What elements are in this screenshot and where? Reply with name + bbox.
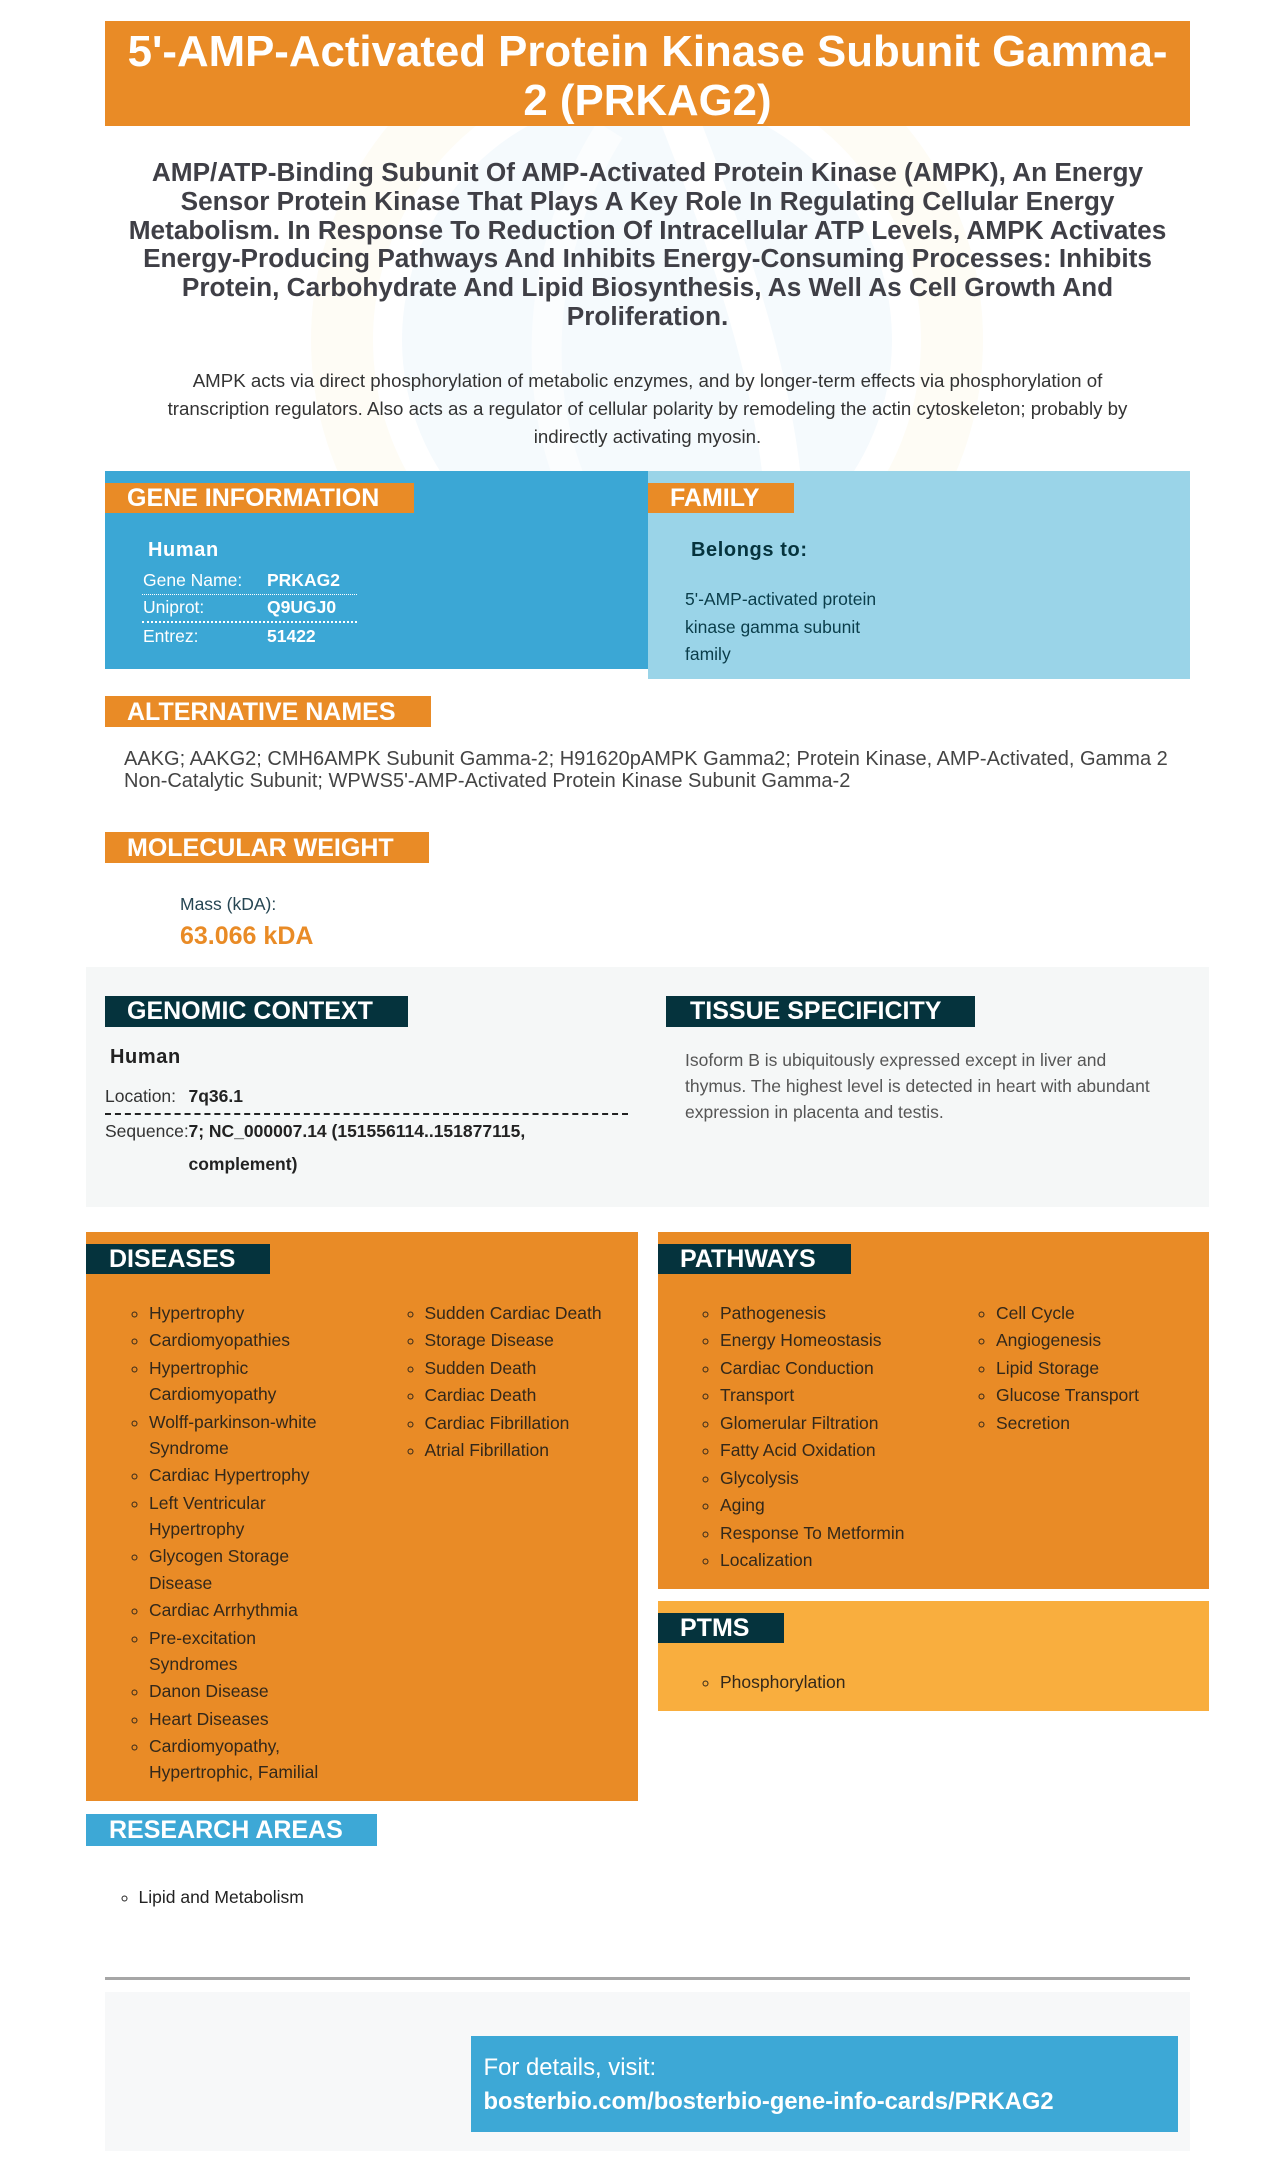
PTMs list: Phosphorylation	[720, 1672, 846, 1692]
diseases list column 1: Hypertrophy	[149, 1303, 244, 1323]
gene identifier rows	[142, 570, 357, 646]
heading: alternative names: ALTERNATIVE NAMES	[127, 698, 396, 726]
research areas list: Lipid and Metabolism	[138, 1887, 304, 1907]
diseases list column 2: Sudden Death	[424, 1358, 536, 1378]
pathways list column 1: Response To Metformin	[720, 1522, 904, 1542]
subtitle: protein function summary: Sensor Protein Kinase That Plays A Key Role In Regulating Cellular Energy	[181, 186, 1114, 216]
tissue specificity text: Isoform B is ubiquitously expressed except in liver and	[685, 1050, 1106, 1070]
pathways list column 2: Secretion	[996, 1413, 1070, 1433]
diseases list column 2: Cardiac Death	[424, 1385, 536, 1405]
subtitle: protein function summary: Proliferation.	[567, 301, 728, 331]
alternative names text: Non-Catalytic Subunit; WPWS5'-AMP-Activated Protein Kinase Subunit Gamma-2	[124, 770, 850, 792]
sequence value	[188, 1120, 525, 1174]
pathways list column 2: Cell Cycle	[996, 1303, 1075, 1323]
diseases list column 2: Storage Disease	[424, 1330, 554, 1350]
heading: diseases: DISEASES	[109, 1245, 235, 1273]
heading: genomic context: GENOMIC CONTEXT	[127, 997, 373, 1025]
belongs to label: Belongs to:	[691, 538, 808, 560]
subtitle: protein function summary: Metabolism. In Response To Reduction Of Intracellular ATP Levels, AMPK Activates	[129, 215, 1166, 245]
description paragraph	[168, 370, 1128, 447]
sequence label: Sequence:	[105, 1121, 189, 1141]
background watermark logo	[311, 126, 983, 471]
panel: PTMs	[658, 1601, 1209, 1711]
diseases list column 2	[408, 1303, 602, 1460]
heading: PTMs	[658, 1613, 784, 1643]
pathways list column 1: Fatty Acid Oxidation	[720, 1440, 876, 1460]
heading: tissue specificity: TISSUE SPECIFICITY	[690, 997, 941, 1025]
heading: family: FAMILY	[670, 484, 759, 512]
diseases list column 1: Cardiomyopathy,	[149, 1736, 280, 1756]
alternative names text: AAKG; AAKG2; CMH6AMPK Subunit Gamma-2; H91620pAMPK Gamma2; Protein Kinase, AMP-Activated, Gamma 2	[124, 748, 1168, 770]
diseases list column 1: Hypertrophy	[149, 1519, 244, 1539]
title: 5'-AMP-Activated Protein Kinase Subunit Gamma-	[128, 27, 1167, 76]
subtitle: protein function summary: Protein, Carbohydrate And Lipid Biosynthesis, As Well As Cell Growth And	[182, 272, 1113, 302]
subtitle: protein function summary: AMP/ATP-Binding Subunit Of AMP-Activated Protein Kinase (AMPK), An Energy	[152, 157, 1143, 187]
heading: research areas: RESEARCH AREAS	[109, 1816, 343, 1844]
diseases list column 2: Sudden Cardiac Death	[424, 1303, 602, 1323]
diseases list column 1: Disease	[149, 1573, 212, 1593]
panel: gene information	[105, 471, 648, 669]
pathways list column 2: Angiogenesis	[996, 1330, 1101, 1350]
species name: Human	[110, 1046, 181, 1068]
tissue specificity text	[685, 1050, 1150, 1122]
pathways list column 1: Energy Homeostasis	[720, 1330, 881, 1350]
family description	[685, 589, 876, 664]
diseases list column 1: Hypertrophic, Familial	[149, 1762, 318, 1782]
panel: pathways	[658, 1232, 1209, 1589]
family description: 5'-AMP-activated protein	[685, 589, 876, 609]
tissue specificity text: thymus. The highest level is detected in heart with abundant	[685, 1076, 1150, 1096]
description paragraph: transcription regulators. Also acts as a regulator of cellular polarity by remodeling the actin cytoskeleton; probably by	[168, 398, 1127, 419]
location row: Location:	[105, 1086, 176, 1106]
diseases list column 1: Cardiomyopathy	[149, 1384, 276, 1404]
subtitle: protein function summary: Energy-Producing Pathways And Inhibits Energy-Consuming Processes: Inhibits	[143, 243, 1152, 273]
location value: 7q36.1	[188, 1086, 243, 1106]
family description: family	[685, 644, 731, 664]
diseases list column 1: Pre-excitation	[149, 1628, 256, 1648]
diseases list column 1: Glycogen Storage	[149, 1546, 289, 1566]
diseases list column 1: Cardiac Hypertrophy	[149, 1465, 309, 1485]
diseases list column 1	[132, 1303, 318, 1782]
diseases list column 1: Cardiac Arrhythmia	[149, 1600, 298, 1620]
diseases list column 1: Syndrome	[149, 1438, 229, 1458]
pathways list column 1: Transport	[720, 1385, 794, 1405]
gene identifier rows: Uniprot:	[143, 597, 204, 617]
diseases list column 1: Syndromes	[149, 1654, 238, 1674]
title	[105, 21, 1190, 126]
heading: PTMs: PTMS	[680, 1614, 749, 1642]
pathways list column 2	[978, 1303, 1139, 1433]
panel: family	[648, 471, 1190, 679]
heading: family	[648, 483, 794, 513]
diseases list column 1: Left Ventricular	[149, 1493, 266, 1513]
title: 2 (PRKAG2)	[523, 76, 772, 125]
family description: kinase gamma subunit	[685, 616, 860, 636]
pathways list column 1: Pathogenesis	[720, 1303, 826, 1323]
heading: molecular weight: MOLECULAR WEIGHT	[127, 834, 394, 862]
gene identifier rows: PRKAG2	[267, 570, 340, 590]
callout: details link	[471, 2036, 1178, 2132]
tissue specificity text: expression in placenta and testis.	[685, 1102, 944, 1122]
diseases list column 1: Hypertrophic	[149, 1358, 248, 1378]
pathways list column 1: Cardiac Conduction	[720, 1358, 874, 1378]
diseases list column 2: Cardiac Fibrillation	[424, 1413, 569, 1433]
sequence value: 7; NC_000007.14 (151556114..151877115,	[188, 1120, 525, 1140]
heading: gene information: GENE INFORMATION	[127, 484, 379, 512]
heading: pathways	[658, 1244, 851, 1274]
mass value: 63.066 kDA	[180, 922, 313, 950]
gene identifier rows: 51422	[267, 626, 316, 646]
sequence value: complement)	[188, 1154, 297, 1174]
panel: footer	[105, 1992, 1190, 2151]
callout URL: bosterbio.com/bosterbio-gene-info-cards/PRKAG2	[484, 2088, 1054, 2115]
species name: Human	[148, 538, 219, 560]
diseases list column 1: Danon Disease	[149, 1681, 269, 1701]
subtitle: protein function summary	[129, 157, 1166, 331]
mass label: Mass (kDA):	[180, 894, 276, 914]
diseases list column 2: Atrial Fibrillation	[424, 1440, 549, 1460]
pathways list column 2: Lipid Storage	[996, 1358, 1099, 1378]
gene identifier rows: Q9UGJ0	[267, 597, 336, 617]
alternative names text	[124, 748, 1168, 792]
pathways list column 1: Glycolysis	[720, 1468, 799, 1488]
pathways list column 1: Glomerular Filtration	[720, 1413, 879, 1433]
description paragraph: indirectly activating myosin.	[534, 426, 761, 447]
heading: diseases	[86, 1244, 270, 1274]
pathways list column 1	[702, 1303, 904, 1570]
gene identifier rows: Entrez:	[143, 626, 198, 646]
panel: diseases	[86, 1232, 638, 1801]
heading: pathways: PATHWAYS	[680, 1245, 816, 1273]
diseases list column 1: Wolff-parkinson-white	[149, 1412, 317, 1432]
diseases list column 1: Heart Diseases	[149, 1709, 269, 1729]
gene identifier rows: Gene Name:	[143, 570, 242, 590]
description paragraph: AMPK acts via direct phosphorylation of metabolic enzymes, and by longer-term effects via phosphorylation of	[193, 370, 1102, 391]
pathways list column 1: Localization	[720, 1550, 812, 1570]
diseases list column 1: Cardiomyopathies	[149, 1330, 290, 1350]
pathways list column 2: Glucose Transport	[996, 1385, 1139, 1405]
callout label: For details, visit:	[484, 2054, 656, 2081]
panel: genomic context and tissue specificity	[86, 967, 1209, 1207]
pathways list column 1: Aging	[720, 1495, 765, 1515]
